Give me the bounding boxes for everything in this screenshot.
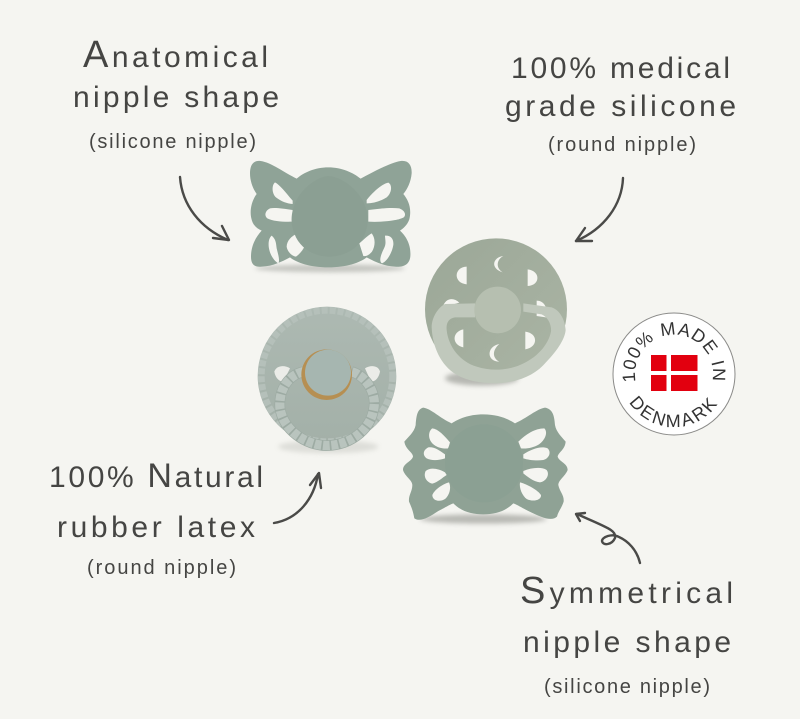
heading: anatomical nipple shape: Anatomical — [83, 34, 268, 76]
heading: symmetrical nipple shape: (silicone nipple) — [544, 676, 710, 698]
shadow — [278, 440, 378, 453]
knob cap — [305, 350, 351, 396]
heading: medical grade silicone — [505, 52, 736, 156]
heading: natural rubber latex: rubber latex — [57, 511, 255, 544]
heading: symmetrical nipple shape — [520, 570, 733, 698]
badge circle — [613, 313, 735, 435]
center knob — [292, 176, 368, 257]
heading: medical grade silicone: grade silicone — [505, 90, 736, 123]
heading: medical grade silicone: 100% medical — [511, 52, 730, 85]
center knob — [474, 287, 521, 333]
shadow — [445, 371, 518, 386]
heading: anatomical nipple shape: nipple shape — [73, 81, 279, 114]
shadow — [420, 514, 547, 524]
heading: natural rubber latex: 100% Natural — [49, 457, 263, 495]
pacifier: rope — [258, 307, 396, 453]
handle ring — [432, 303, 566, 383]
heading: symmetrical nipple shape: Symmetrical — [520, 570, 733, 612]
heading: anatomical nipple shape — [73, 34, 279, 153]
heading: anatomical nipple shape: (silicone nipple) — [89, 131, 256, 153]
heading: natural rubber latex — [49, 457, 263, 579]
side cutouts — [274, 366, 290, 382]
arrow: to symmetrical pacifier — [576, 513, 640, 563]
rope edge — [261, 310, 393, 442]
pacifier: butterfly — [250, 161, 412, 272]
arrow: to moon pacifier — [576, 178, 623, 241]
badge text top: 100% MADE IN — [622, 322, 726, 381]
cutouts — [265, 182, 405, 263]
arrow: to rope pacifier — [274, 473, 321, 523]
shield — [250, 161, 412, 267]
latex knob base — [301, 349, 352, 400]
flag: Denmark — [651, 355, 698, 391]
pacifier: moon — [425, 238, 567, 386]
shadow — [255, 264, 405, 272]
shield disc — [425, 238, 567, 380]
cutouts — [424, 428, 550, 501]
heading: natural rubber latex: (round nipple) — [87, 557, 236, 579]
badge text bottom: DENMARK — [630, 396, 718, 428]
badge: 100% made in Denmark — [612, 312, 736, 436]
pacifier: symmetrical — [403, 408, 568, 524]
heading: symmetrical nipple shape: nipple shape — [523, 626, 731, 659]
center knob — [445, 424, 523, 502]
shield — [403, 408, 568, 520]
arrow: to butterfly pacifier — [180, 177, 229, 240]
heading: medical grade silicone: (round nipple) — [548, 134, 696, 156]
rope handle — [280, 372, 374, 446]
moon cutouts — [443, 256, 547, 362]
rope disc — [258, 307, 396, 445]
